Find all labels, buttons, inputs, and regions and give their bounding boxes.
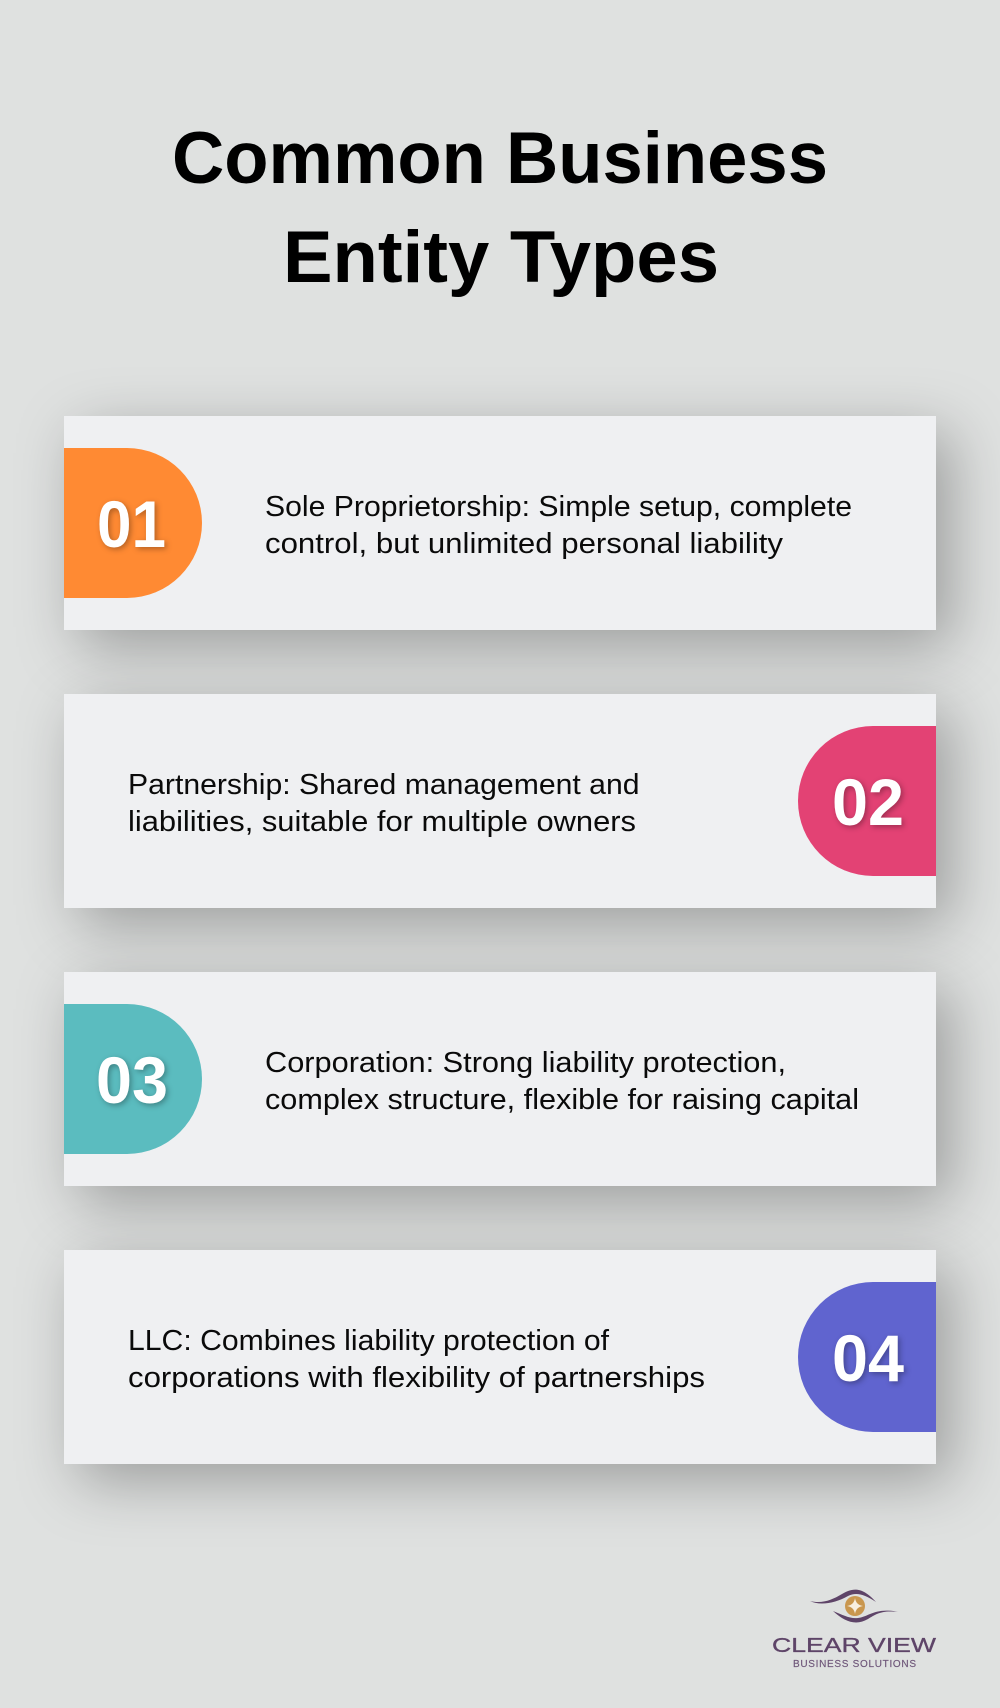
- panel: corporation: [64, 972, 936, 1186]
- logo wordmark: CLEAR VIEW: [772, 1635, 936, 1657]
- text: corporation: Corporation: Strong liability protection,: [265, 1047, 786, 1079]
- title: Common Business: [172, 118, 828, 199]
- panel: partnership: [64, 694, 936, 908]
- number 01: 01: [97, 487, 166, 561]
- number 03: 03: [96, 1043, 168, 1117]
- title: [172, 118, 828, 298]
- number badge 04: [798, 1282, 936, 1432]
- text: partnership: Partnership: Shared management and: [128, 769, 640, 801]
- text: sole proprietorship: Sole Proprietorship: Simple setup, complete: [265, 491, 852, 523]
- text: partnership: [128, 769, 640, 838]
- logo tagline: BUSINESS SOLUTIONS: [793, 1659, 916, 1670]
- text: llc: [128, 1325, 705, 1394]
- number badge 01: [64, 448, 202, 598]
- title: Entity Types: [283, 217, 719, 298]
- text: corporation: [265, 1047, 859, 1116]
- number 02: 02: [832, 765, 904, 839]
- text: llc: corporations with flexibility of partnerships: [128, 1362, 705, 1394]
- icon: eye: [810, 1590, 898, 1622]
- number badge 02: [798, 726, 936, 876]
- panel: sole proprietorship: [64, 416, 936, 630]
- number badge 03: [64, 1004, 202, 1154]
- logo: clear view: [772, 1590, 936, 1670]
- text: corporation: complex structure, flexible for raising capital: [265, 1084, 859, 1116]
- text: partnership: liabilities, suitable for multiple owners: [128, 806, 636, 838]
- number 04: 04: [832, 1321, 904, 1395]
- panel: llc: [64, 1250, 936, 1464]
- text: llc: LLC: Combines liability protection of: [128, 1325, 610, 1357]
- text: sole proprietorship: [265, 491, 852, 560]
- text: sole proprietorship: control, but unlimited personal liability: [265, 528, 784, 560]
